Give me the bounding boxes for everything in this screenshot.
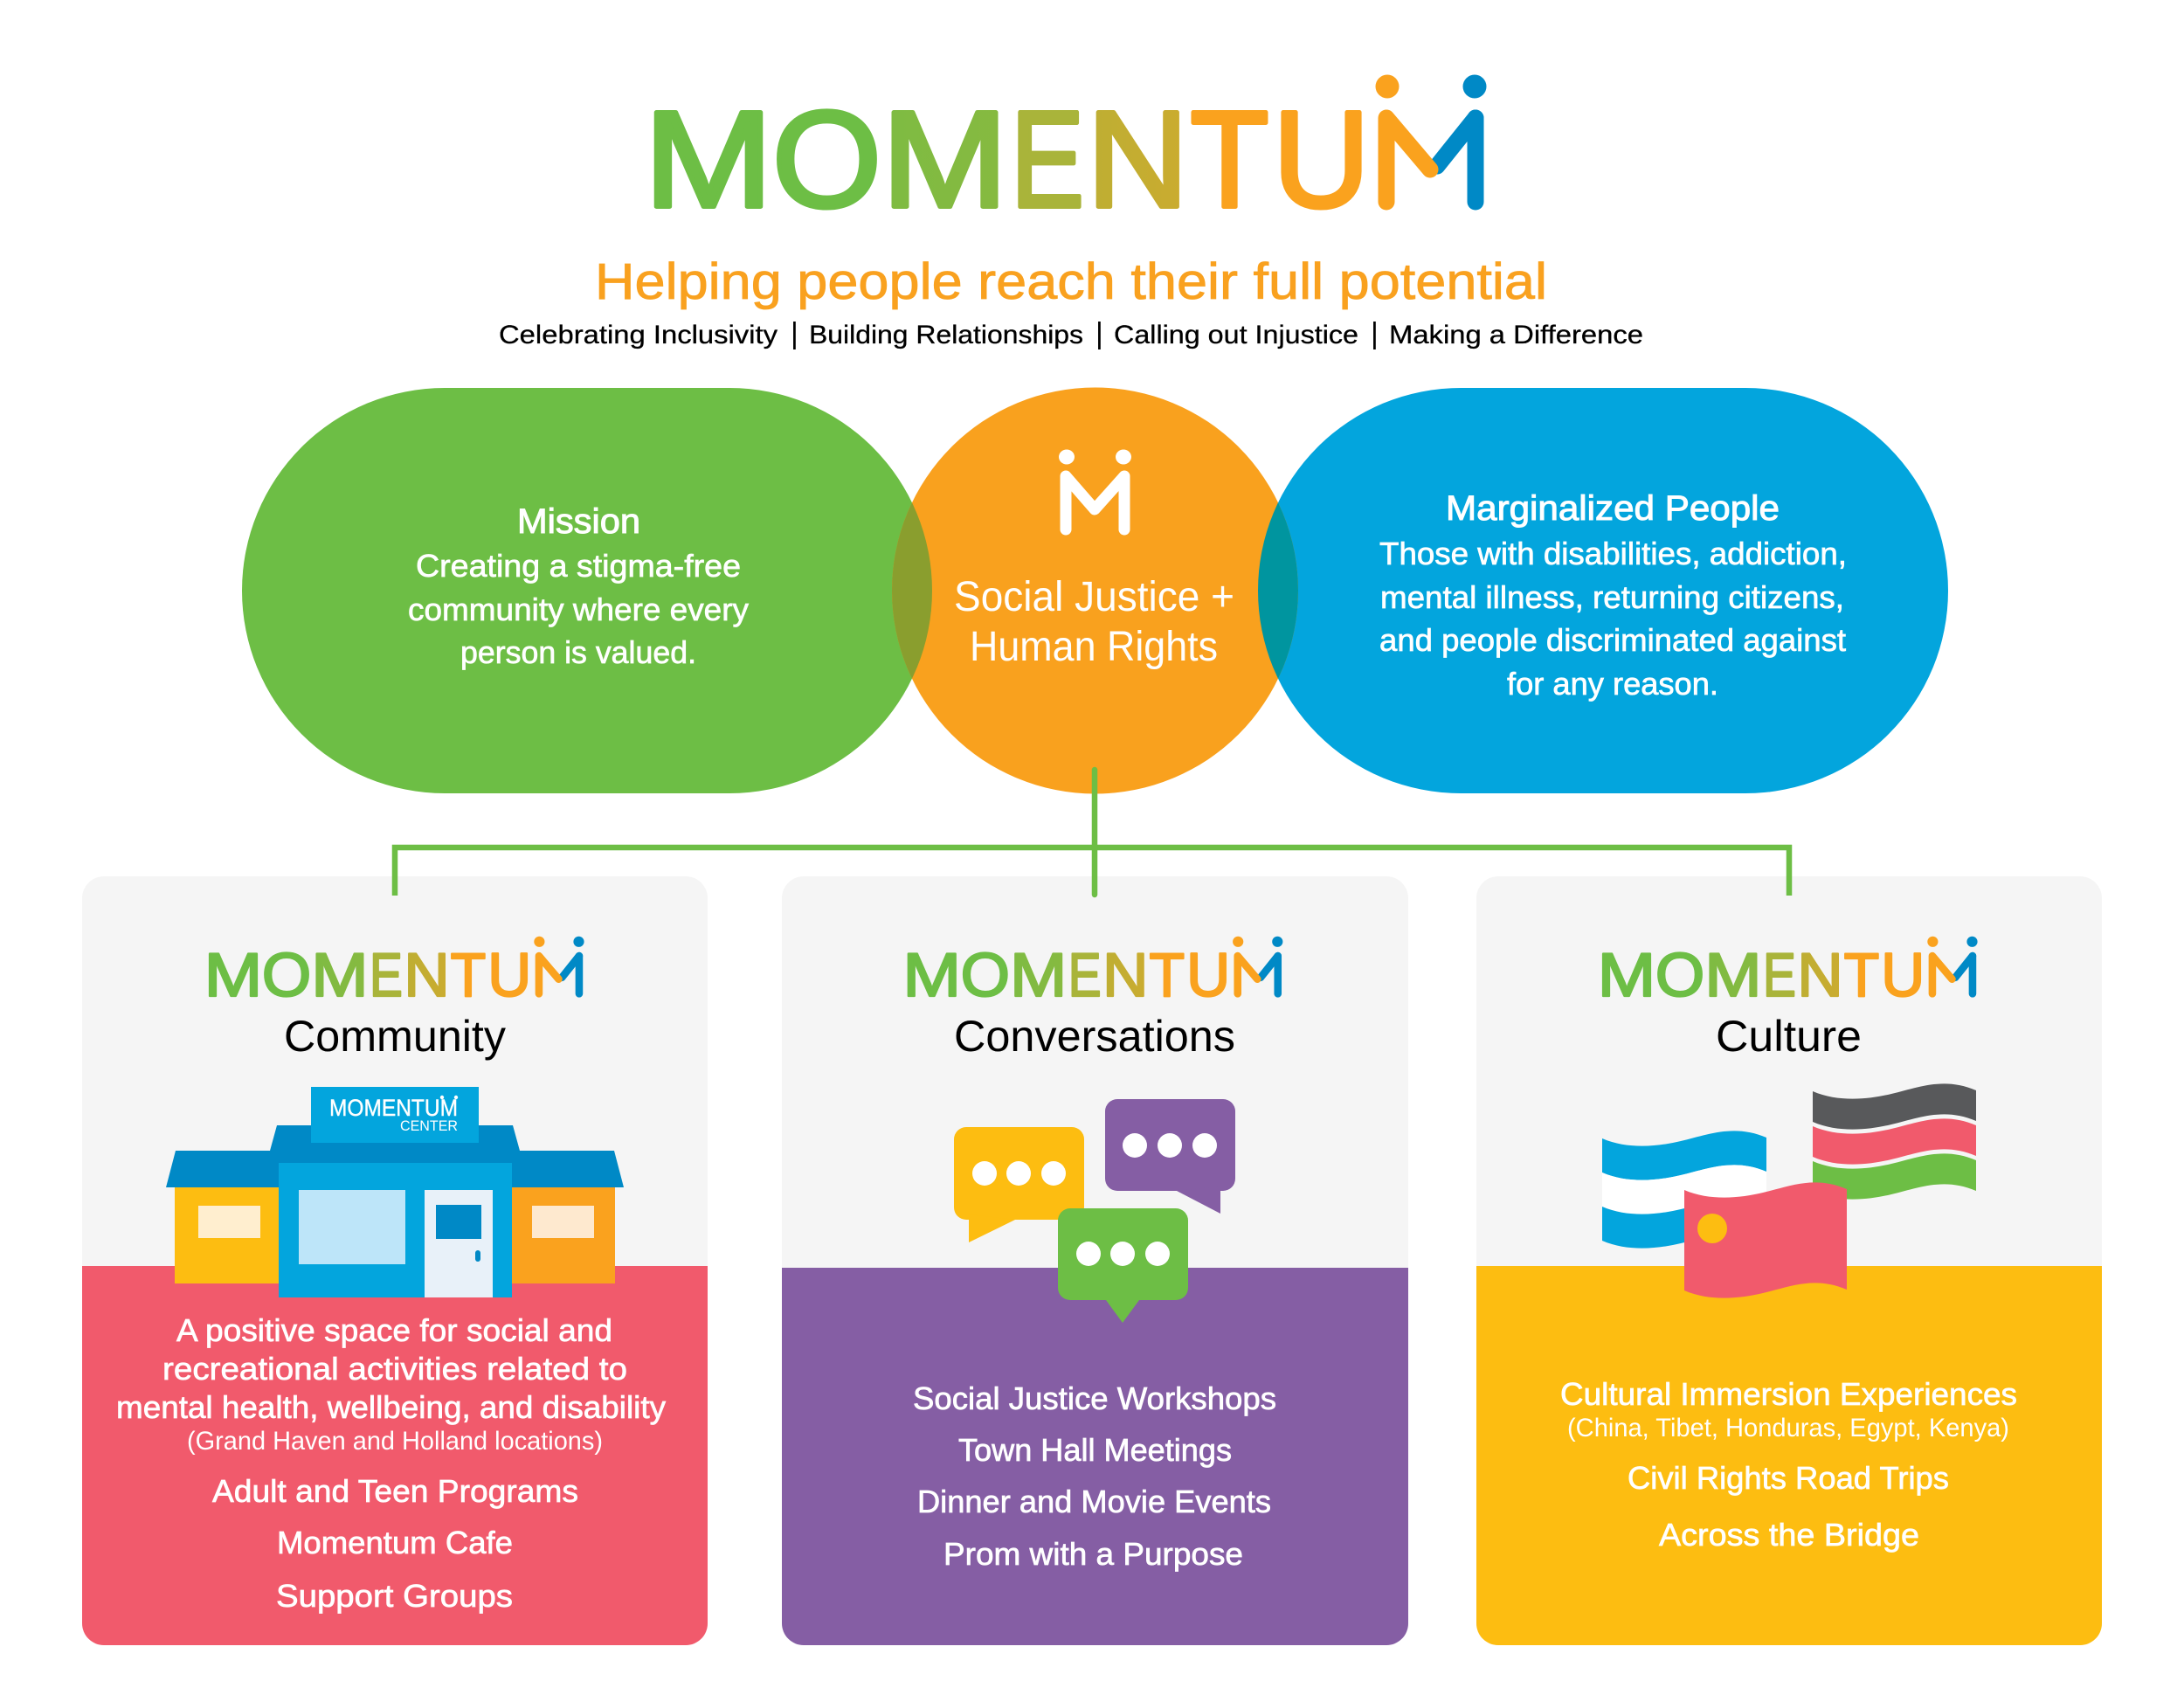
conversations logo: E xyxy=(1068,941,1102,1010)
mission heading: Mission xyxy=(517,502,640,541)
icon: flags xyxy=(1602,1083,1976,1298)
logo wordmark: M xyxy=(881,84,1008,236)
community logo: M xyxy=(311,941,369,1010)
community logo xyxy=(204,937,588,1010)
panel: culture xyxy=(1476,876,2102,1645)
marginalized text: for any reason. xyxy=(1507,666,1718,702)
conversations logo: O xyxy=(961,941,1010,1010)
icon: speech bubbles xyxy=(954,1099,1235,1323)
culture logo: U xyxy=(1881,941,1925,1010)
panel: conversations xyxy=(782,876,1408,1645)
community text: mental health, wellbeing, and disability xyxy=(116,1389,666,1425)
logo wordmark: T xyxy=(1190,84,1268,236)
circle title xyxy=(954,574,1234,670)
conversations logo: M xyxy=(902,941,961,1010)
panel: social justice circle xyxy=(892,388,1298,793)
marginalized heading: Marginalized People xyxy=(1446,489,1780,528)
icon: momentum center building: MOMENTUM xyxy=(329,1095,458,1121)
logo wordmark: N xyxy=(1087,84,1188,236)
conversations text xyxy=(913,1380,1276,1572)
culture logo: M xyxy=(1704,941,1762,1010)
conversations logo xyxy=(902,937,1287,1010)
logo wordmark: M xyxy=(644,84,773,236)
values line: | xyxy=(791,317,798,350)
community logo: O xyxy=(262,941,311,1010)
logo wordmark: U xyxy=(1273,84,1370,236)
culture logo: O xyxy=(1655,941,1704,1010)
tagline: Helping people reach their full potential xyxy=(595,253,1547,310)
conversations logo: M xyxy=(1010,941,1067,1010)
mission text: community where every xyxy=(408,591,749,627)
panel: community xyxy=(82,876,708,1645)
logo wordmark: O xyxy=(772,84,881,236)
values line: Building Relationships xyxy=(809,321,1083,349)
culture logo: M xyxy=(1598,941,1655,1010)
community text: Momentum Cafe xyxy=(277,1525,513,1560)
community text: Support Groups xyxy=(276,1578,513,1614)
icon: momentum center building: CENTER xyxy=(400,1117,458,1134)
values line: Celebrating Inclusivity xyxy=(499,321,778,349)
conversations text: Dinner and Movie Events xyxy=(917,1484,1271,1519)
icon: momentum center building xyxy=(166,1087,624,1297)
conversations text: Town Hall Meetings xyxy=(958,1432,1232,1468)
circle title: Social Justice + xyxy=(954,574,1234,620)
community logo: M xyxy=(204,941,262,1010)
culture text: Civil Rights Road Trips xyxy=(1628,1460,1949,1496)
community text: Adult and Teen Programs xyxy=(212,1473,578,1509)
culture text: Cultural Immersion Experiences xyxy=(1560,1376,2017,1412)
community text: (Grand Haven and Holland locations) xyxy=(187,1427,603,1456)
community logo: U xyxy=(487,941,531,1010)
community text xyxy=(116,1312,666,1614)
culture logo: E xyxy=(1763,941,1796,1010)
mission text: person is valued. xyxy=(460,634,696,670)
culture heading: Culture xyxy=(1716,1012,1862,1061)
culture logo xyxy=(1598,937,1981,1010)
logo wordmark: E xyxy=(1011,84,1084,236)
community text: recreational activities related to xyxy=(162,1351,627,1387)
values line: Making a Difference xyxy=(1389,321,1643,349)
conversations logo: U xyxy=(1186,941,1230,1010)
panel: marginalized people xyxy=(1258,388,1948,793)
circle title: Human Rights xyxy=(970,624,1218,670)
conversations logo: N xyxy=(1102,941,1149,1010)
conversations text: Social Justice Workshops xyxy=(913,1380,1276,1416)
culture text: (China, Tibet, Honduras, Egypt, Kenya) xyxy=(1567,1414,2009,1442)
community heading: Community xyxy=(284,1012,506,1061)
marginalized text: Those with disabilities, addiction, xyxy=(1379,536,1847,571)
conversations text: Prom with a Purpose xyxy=(943,1536,1243,1572)
marginalized text xyxy=(1379,536,1847,702)
icon: white M people xyxy=(1059,449,1131,529)
community logo: N xyxy=(404,941,450,1010)
mission text xyxy=(408,548,749,670)
culture logo: T xyxy=(1844,941,1879,1010)
connector lines xyxy=(395,770,1789,896)
marginalized text: and people discriminated against xyxy=(1379,622,1846,658)
community logo: T xyxy=(451,941,486,1010)
values line: Calling out Injustice xyxy=(1114,321,1358,349)
culture logo: N xyxy=(1797,941,1843,1010)
conversations logo: T xyxy=(1149,941,1185,1010)
culture text xyxy=(1560,1376,2017,1553)
culture text: Across the Bridge xyxy=(1659,1517,1919,1553)
community text: A positive space for social and xyxy=(176,1312,612,1348)
values line: | xyxy=(1095,317,1103,350)
logo people M xyxy=(1375,75,1487,202)
community logo: E xyxy=(370,941,403,1010)
marginalized text: mental illness, returning citizens, xyxy=(1380,579,1844,615)
values line: | xyxy=(1371,317,1379,350)
conversations heading: Conversations xyxy=(954,1012,1235,1061)
mission text: Creating a stigma-free xyxy=(416,548,741,584)
panel: mission xyxy=(242,388,932,793)
main logo xyxy=(644,75,1495,236)
